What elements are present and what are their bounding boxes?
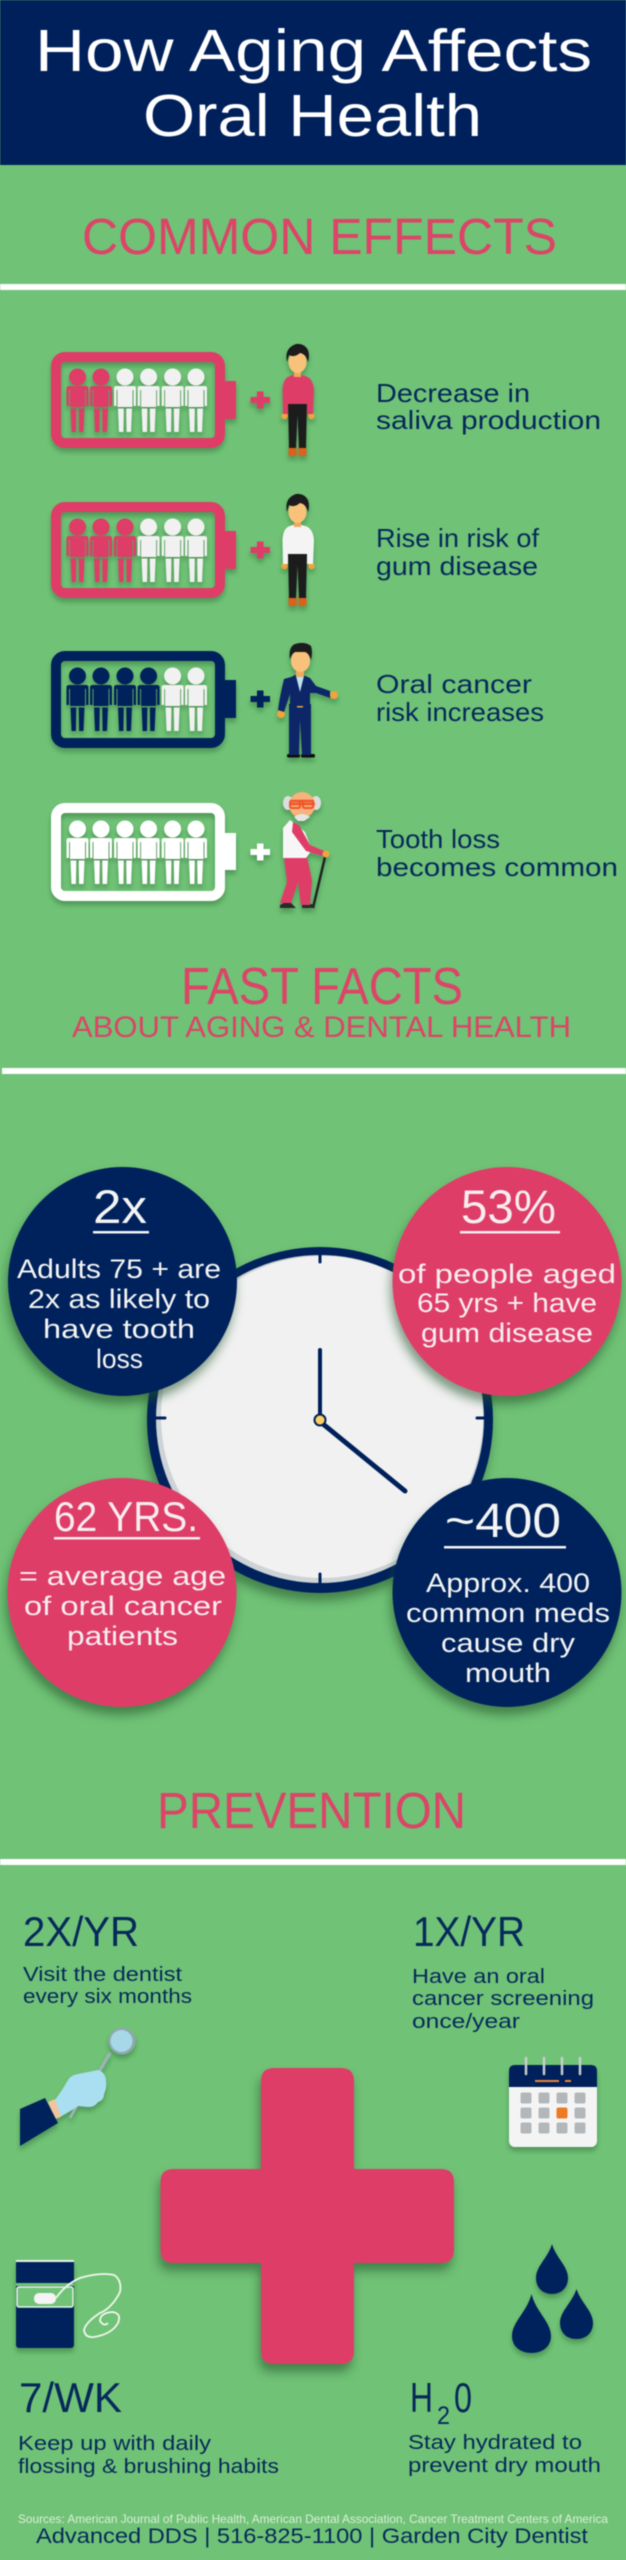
heading: common effects: COMMON EFFECTS	[82, 208, 557, 265]
text: decrease in saliva production: saliva production	[376, 405, 601, 435]
icon: gloved hand holding dental mirror	[20, 2028, 136, 2146]
callout: about 400 medications: cause dry	[441, 1628, 576, 1658]
callout: 53% gum disease: 53%	[461, 1180, 556, 1233]
panel: daily flossing: 7/WK	[19, 2374, 122, 2421]
callout: 62 years average age	[8, 1478, 236, 1707]
text: decrease in saliva production	[376, 378, 601, 435]
callout: 2x tooth loss: have tooth	[43, 1314, 195, 1344]
heading: prevention: PREVENTION	[157, 1782, 466, 1839]
callout: 2x tooth loss: loss	[96, 1344, 143, 1374]
panel: stay hydrated	[408, 2244, 601, 2477]
panel: visit the dentist: 2X/YR	[23, 1908, 139, 1955]
heading: fast facts: ABOUT AGING & DENTAL HEALTH	[72, 1011, 571, 1044]
text: oral cancer risk increases	[376, 669, 544, 727]
text: tooth loss becomes common	[376, 824, 618, 882]
callout: 62 years average age: 62 YRS.	[54, 1493, 198, 1540]
title banner: How Aging Affects	[35, 18, 592, 84]
callout: about 400 medications: Approx. 400	[426, 1568, 590, 1598]
icon: elderly man with cane	[280, 792, 330, 908]
panel: visit the dentist	[20, 1908, 192, 2146]
footer	[18, 2512, 608, 2548]
panel: stay hydrated: prevent dry mouth	[408, 2455, 601, 2477]
callout: about 400 medications: ~400	[445, 1495, 561, 1548]
panel: oral cancer screening: Have an oral	[412, 1966, 545, 1988]
text: decrease in saliva production: Decrease in	[376, 378, 530, 408]
text: rise in risk of gum disease: gum disease	[376, 551, 538, 581]
icon: person in pink sweater	[281, 344, 315, 456]
title banner	[0, 0, 626, 165]
text: oral cancer risk increases: Oral cancer	[376, 669, 532, 699]
icon: battery with two filled people	[56, 357, 270, 443]
footer: Sources: American Journal of Public Health, American Dental Association, Cancer Treatment Centers of America	[18, 2512, 608, 2526]
panel: daily flossing: flossing & brushing habits	[18, 2456, 279, 2478]
icon: water drops	[512, 2244, 593, 2353]
callout: about 400 medications: common meds	[406, 1598, 610, 1628]
callout: 53% gum disease: of people aged	[398, 1259, 616, 1289]
callout: 62 years average age: patients	[67, 1621, 178, 1651]
callout: 2x tooth loss: Adults 75 + are	[17, 1254, 221, 1284]
panel: effect row 4 tooth loss	[56, 792, 618, 908]
icon: man in navy suit	[277, 643, 338, 758]
icon: battery with three filled people	[56, 507, 270, 593]
icon: red cross	[160, 2068, 454, 2364]
callout: 2x tooth loss	[8, 1167, 237, 1396]
panel: daily flossing: Keep up with daily	[18, 2433, 211, 2455]
text: oral cancer risk increases: risk increases	[376, 697, 544, 727]
callout: about 400 medications	[392, 1478, 622, 1707]
icon: full white battery	[56, 808, 270, 896]
callout: 62 years average age: of oral cancer	[24, 1591, 222, 1621]
chart: clock	[147, 1247, 493, 1593]
panel: effect row 3 oral cancer	[56, 643, 544, 758]
panel: effect row 1 saliva	[56, 344, 601, 456]
text: rise in risk of gum disease: Rise in risk of	[376, 523, 540, 553]
panel: daily flossing	[16, 2260, 279, 2478]
panel: stay hydrated: Stay hydrated to	[408, 2432, 582, 2454]
heading: H2O: 0	[454, 2374, 472, 2421]
text: tooth loss becomes common: Tooth loss	[376, 824, 500, 854]
panel: visit the dentist: Visit the dentist	[23, 1964, 183, 1986]
heading: H2O: H	[410, 2374, 433, 2421]
icon: battery with four filled people	[56, 656, 270, 743]
panel: oral cancer screening: once/year	[412, 2011, 520, 2033]
callout: about 400 medications: mouth	[465, 1658, 551, 1688]
panel: visit the dentist: every six months	[23, 1986, 192, 2008]
heading: H2O: 2	[437, 2402, 450, 2430]
footer: Advanced DDS | 516-825-1100 | Garden City Dentist	[36, 2525, 588, 2548]
panel: oral cancer screening	[412, 1908, 597, 2147]
icon: dental floss box	[16, 2260, 120, 2348]
icon: calendar	[509, 2058, 597, 2147]
panel: effect row 2 gum disease	[56, 494, 540, 606]
callout: 62 years average age: = average age	[19, 1561, 226, 1591]
heading: fast facts: FAST FACTS	[181, 958, 463, 1016]
callout: 53% gum disease: 65 yrs + have	[417, 1288, 597, 1318]
callout: 53% gum disease	[392, 1167, 622, 1396]
title banner: Oral Health	[143, 83, 482, 149]
text: rise in risk of gum disease	[376, 523, 540, 581]
panel: oral cancer screening: 1X/YR	[413, 1908, 525, 1955]
callout: 2x tooth loss: 2x as likely to	[28, 1284, 210, 1314]
text: tooth loss becomes common: becomes common	[376, 852, 618, 882]
heading: fast facts	[72, 958, 571, 1044]
callout: 2x tooth loss: 2x	[93, 1180, 147, 1233]
callout: 53% gum disease: gum disease	[421, 1318, 593, 1348]
icon: person in white sweater	[281, 494, 315, 606]
panel: oral cancer screening: cancer screening	[412, 1988, 594, 2010]
